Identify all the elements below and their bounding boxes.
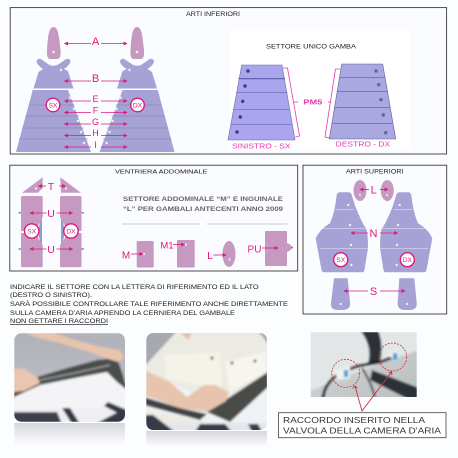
photo: opened air chamber [144, 331, 269, 447]
diagram: settore unico sinistro [228, 65, 295, 140]
text: settore addominale note: “L” PER GAMBALI ANTECENTI ANNO 2009 [123, 206, 283, 213]
diagram: M sector [122, 241, 154, 268]
bracket label: PM5: PM5 [303, 98, 322, 107]
diagram: L sector: L [207, 250, 213, 262]
diagram: T and U sectors: U [47, 208, 55, 220]
arrows and letters: A to I [64, 36, 127, 150]
badge: SX [46, 98, 60, 112]
reflection [14, 423, 125, 445]
text: instructions: NON GETTARE I RACCORDI [10, 318, 108, 325]
callout: raccordo inserito [278, 413, 446, 438]
diagram: settore unico destro [329, 64, 396, 139]
diagram: T and U sectors: SX [27, 228, 37, 236]
callout: raccordo inserito: RACCORDO INSERITO NELLA [283, 415, 426, 425]
diagram: L forearm sectors: L [371, 184, 377, 196]
diagram: T and U sectors: DX [66, 228, 76, 236]
text: instructions [10, 284, 289, 325]
diagram: PU sector [248, 231, 293, 266]
text: instructions: SARÀ POSSIBILE CONTROLLARE TALE RIFERIMENTO ANCHE DIRETTAMENTE [10, 299, 289, 308]
diagram: L sector [207, 241, 236, 267]
diagram: N arm sectors [316, 192, 432, 272]
diagram: S hand sectors: S [370, 286, 377, 298]
callout: raccordo inserito: VALVOLA DELLA CAMERA D'ARIA [283, 426, 442, 436]
arrows: callout pointers [353, 372, 392, 411]
diagram: S hand sectors [331, 278, 417, 310]
text: instructions: INDICARE IL SETTORE CON LA LETTERA DI RIFERIMENTO ED IL LATO [10, 284, 259, 291]
heading: arti superiori: ARTI SUPERIORI [346, 170, 404, 176]
diagram: N arm sectors: N [370, 228, 378, 240]
bracket label: PM5 [283, 68, 340, 138]
callout circle: right valve [379, 343, 407, 371]
diagram: leg sectors [16, 27, 174, 152]
arrows and letters: A to I: G [92, 117, 99, 127]
text: instructions: SULLA CAMERA D'ARIA APRENDO LA CERNIERA DEL GAMBALE [10, 310, 236, 317]
diagram: PU sector: PU [248, 244, 261, 256]
diagram: L forearm sectors [354, 180, 394, 201]
arrows and letters: A to I: I [94, 140, 97, 150]
diagram: T and U sectors [18, 177, 84, 267]
badge: SX: SX [49, 102, 58, 109]
badge: DX: DX [133, 102, 143, 109]
reflection [146, 431, 267, 447]
diagram: M1 sector [160, 240, 195, 268]
photo: opening the zipper [12, 331, 127, 445]
arrows and letters: A to I: H [92, 128, 99, 138]
label: destro dx: DESTRO - DX [336, 140, 390, 149]
arrows and letters: A to I: A [92, 36, 100, 48]
text: instructions: (DESTRO O SINISTRO). [10, 292, 92, 299]
arrows and letters: A to I: B [92, 73, 99, 85]
heading: arti inferiori: ARTI INFERIORI [186, 11, 240, 18]
callout circle: left valve [332, 359, 360, 387]
label: sinistro sx: SINISTRO - SX [232, 142, 291, 151]
badge: DX [131, 98, 144, 112]
photo: air valve connectors [308, 330, 419, 399]
text: settore addominale note [123, 196, 284, 213]
heading: settore unico gamba: SETTORE UNICO GAMBA [266, 43, 357, 50]
diagram: N arm sectors: DX [403, 257, 412, 264]
text: settore addominale note: SETTORE ADDOMINALE “M” E INGUINALE [123, 196, 284, 203]
diagram: T and U sectors: T [48, 181, 55, 193]
panel: arti inferiori [10, 8, 447, 154]
diagram: M sector: M [122, 250, 130, 262]
diagram: M1 sector: M1 [160, 240, 174, 252]
arrows and letters: A to I: E [92, 94, 99, 104]
arrows and letters: A to I: F [93, 106, 99, 116]
panel: ventriera addominale [10, 165, 298, 271]
panel: arti superiori [303, 165, 447, 314]
diagram: N arm sectors: SX [336, 257, 346, 264]
diagram: T and U sectors: U [47, 244, 55, 256]
heading: ventriera addominale: VENTRIERA ADDOMINALE [115, 170, 208, 176]
